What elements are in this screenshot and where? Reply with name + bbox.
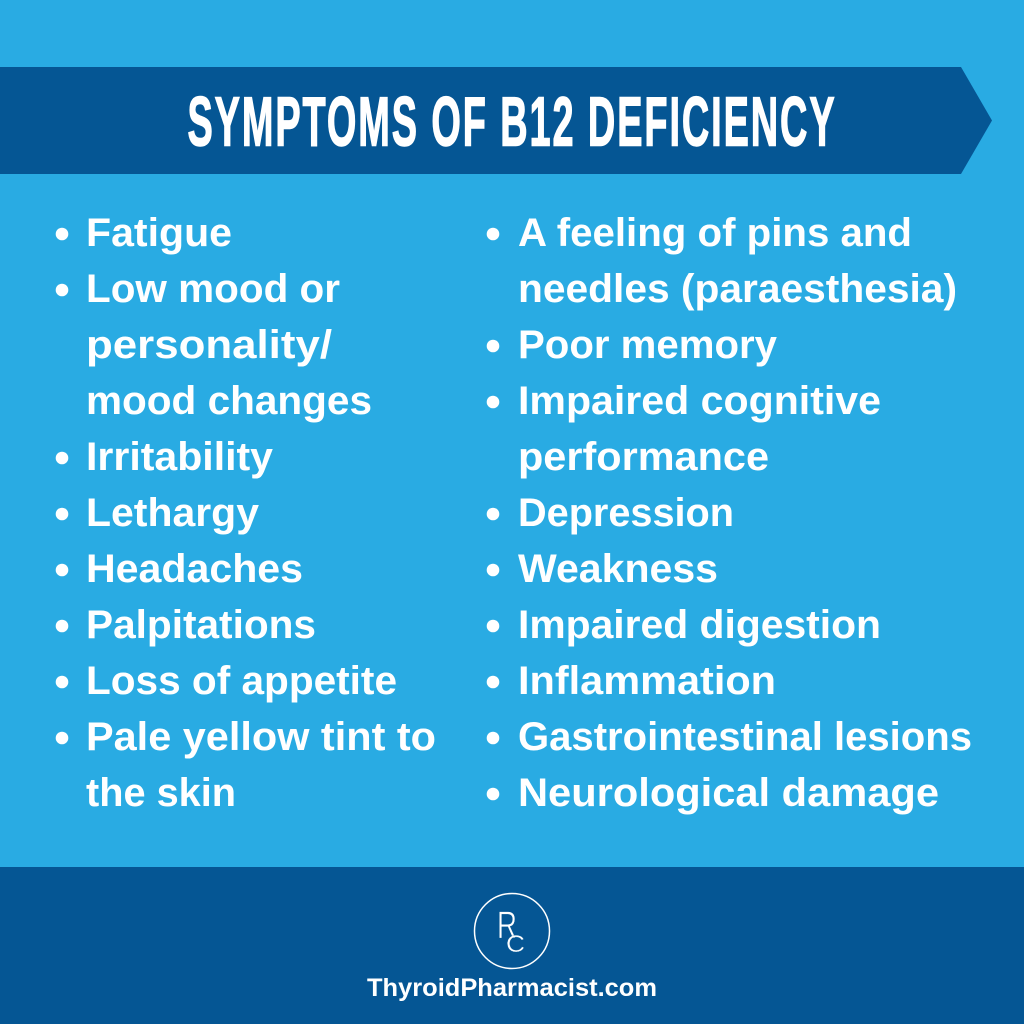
left symptom column: the skin — [86, 771, 236, 815]
left symptom column: Low mood or — [86, 267, 340, 311]
right symptom column — [487, 211, 972, 815]
right symptom column: Neurological damage — [518, 771, 939, 815]
right symptom column: performance — [518, 435, 769, 479]
right symptom column: Impaired cognitive — [518, 379, 881, 423]
left symptom column: Palpitations — [86, 603, 316, 647]
right symptom column: Weakness — [518, 547, 718, 591]
left symptom column: mood changes — [86, 379, 372, 423]
left symptom column: Headaches — [86, 547, 303, 591]
right symptom column: A feeling of pins and — [518, 211, 912, 255]
left symptom column: Pale yellow tint to — [86, 715, 436, 759]
left symptom column: Irritability — [86, 435, 274, 479]
right symptom column: Inflammation — [518, 659, 776, 703]
icon: RC logo: C — [506, 931, 525, 958]
right symptom column: needles (paraesthesia) — [518, 267, 957, 311]
footer website text: ThyroidPharmacist.com — [367, 974, 657, 1002]
title banner — [0, 67, 992, 174]
right symptom column: Depression — [518, 491, 734, 535]
icon: RC logo — [474, 894, 550, 968]
right symptom column: Impaired digestion — [518, 603, 881, 647]
icon: RC logo: R — [497, 904, 517, 947]
right symptom column: Poor memory — [518, 323, 778, 367]
left symptom column: Lethargy — [86, 491, 260, 535]
footer band — [0, 867, 1024, 1024]
left symptom column: Fatigue — [86, 211, 232, 255]
right symptom column: Gastrointestinal lesions — [518, 715, 972, 759]
left symptom column: personality/ — [86, 323, 332, 367]
left symptom column — [56, 211, 436, 815]
left symptom column: Loss of appetite — [86, 659, 397, 703]
